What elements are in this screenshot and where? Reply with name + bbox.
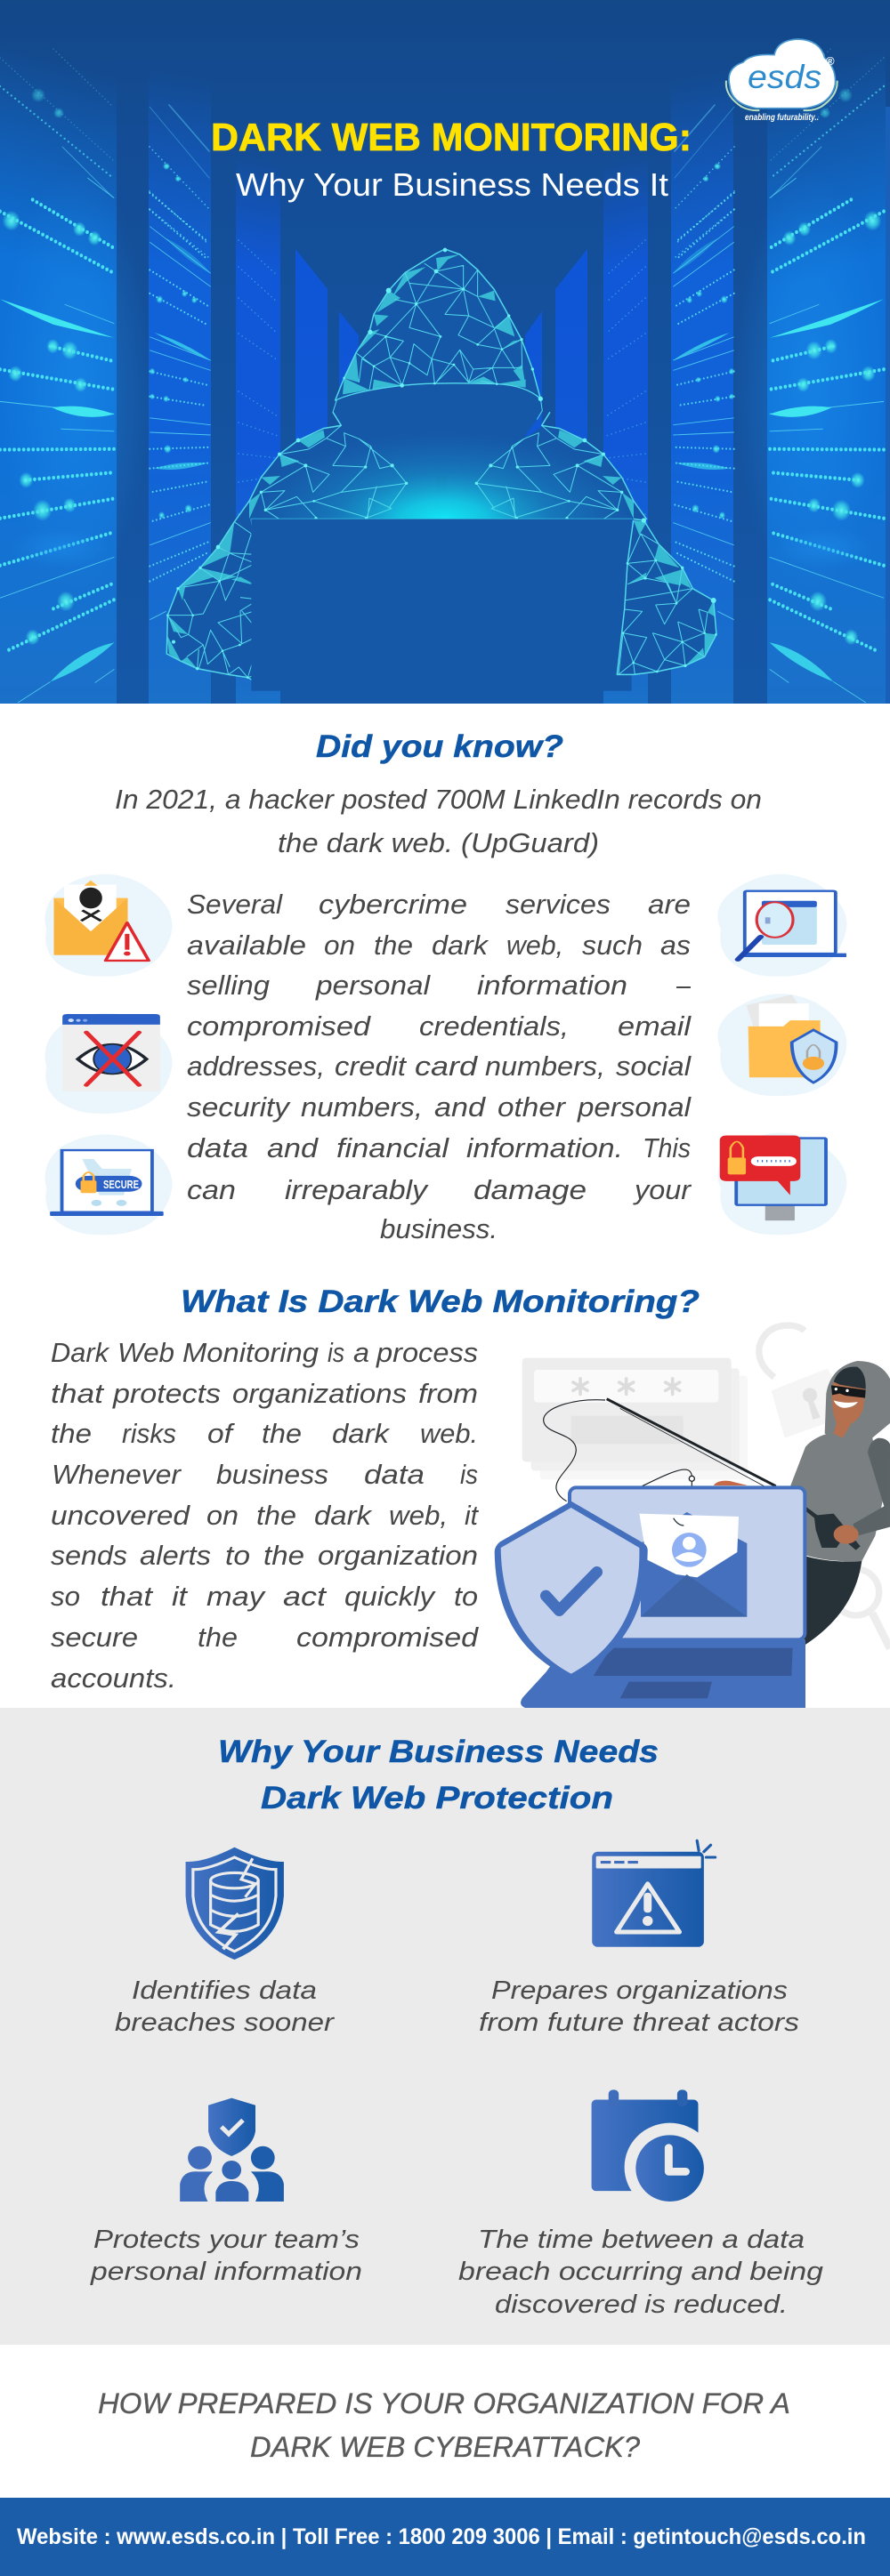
benefit: identifies breaches: breaches sooner [115, 2008, 336, 2037]
icon: calendar clock [592, 2089, 716, 2211]
text block: definition: on [206, 1500, 239, 1531]
text block: cybercrime services: personal [577, 1091, 692, 1123]
text block: cybercrime services: damage [473, 1174, 587, 1205]
benefit: identifies breaches [115, 1976, 336, 2037]
text block: definition: web. [420, 1418, 478, 1449]
benefit: prepares organizations: from future threat actors [479, 2008, 799, 2037]
title: DARK WEB MONITORING: [211, 116, 692, 159]
benefit: reduced time: breach occurring and being [458, 2258, 823, 2286]
icon: folder with shield [717, 994, 846, 1096]
text block: cybercrime services: addresses, [187, 1051, 325, 1082]
text block: definition: to [225, 1540, 250, 1571]
text block: definition: secure [51, 1622, 138, 1653]
closing question [98, 2387, 790, 2463]
benefit: reduced time: The time between a data [478, 2226, 805, 2254]
text block: definition: of [207, 1418, 236, 1449]
faint lock [759, 1325, 852, 1438]
label: secure badge: SECURE [103, 1178, 139, 1191]
logo: esds [726, 39, 837, 123]
icon: team under shield [180, 2098, 284, 2202]
text block: cybercrime services: selling [187, 970, 270, 1001]
shield with check [495, 1501, 648, 1678]
text block: definition: process [376, 1337, 478, 1368]
text block: cybercrime services: – [676, 970, 692, 1001]
text block: definition: compromised [296, 1622, 480, 1653]
right shoulder [475, 411, 648, 519]
text block: definition: risks [122, 1418, 176, 1449]
icon: broken database shield [186, 1847, 284, 1960]
footer contact bar: Website : www.esds.co.in | Toll Free : 1800 209 3006 | Email : getintouch@esds.co.in [17, 2524, 866, 2549]
text block: definition: act [283, 1581, 328, 1612]
footer contact bar [0, 2498, 890, 2576]
envelope with profile card [639, 1512, 747, 1617]
text block: definition: the [262, 1418, 302, 1449]
icon: blocked eye window [45, 1013, 172, 1114]
text block: cybercrime services: information [477, 970, 627, 1001]
text block: cybercrime services: email [618, 1010, 692, 1042]
text block: definition: dark [314, 1500, 373, 1531]
text block: definition: Dark [51, 1337, 109, 1368]
panel: why your business needs protection [0, 1708, 890, 2345]
text block: cybercrime services: social [616, 1051, 692, 1082]
text block: cybercrime services: cybercrime [319, 889, 467, 920]
stat text: LinkedIn records [115, 784, 762, 858]
text block: cybercrime services: Several [187, 889, 283, 920]
text block: cybercrime services: numbers, [485, 1051, 605, 1082]
text block: cybercrime services: services [506, 889, 611, 920]
stat text: LinkedIn records: In 2021, a hacker posted 700M LinkedIn records on [115, 784, 762, 815]
text block: definition: protects [112, 1378, 221, 1409]
heading: what is dark web monitoring: What Is Dark Web Monitoring? [181, 1284, 700, 1319]
text block: cybercrime services: on [324, 930, 355, 961]
text block: definition: sends [51, 1540, 127, 1571]
text block: definition: Whenever [52, 1459, 182, 1490]
hook line [643, 1469, 692, 1512]
benefit: prepares organizations [479, 1976, 799, 2037]
text block: definition: business [216, 1459, 328, 1490]
heading: why your business needs: Dark Web Protection [261, 1781, 613, 1815]
laptop silhouette [251, 519, 632, 691]
text block: definition: the [198, 1622, 238, 1653]
text block: definition: web, [389, 1500, 448, 1531]
text block: cybercrime services: web, [506, 930, 563, 961]
text block: cybercrime services: business. [380, 1213, 498, 1244]
text block: cybercrime services: as [660, 930, 691, 961]
text block: definition: alerts [140, 1540, 211, 1571]
faint magnifier [833, 1569, 890, 1648]
text block: definition: uncovered [51, 1500, 191, 1531]
chest glow [279, 446, 608, 519]
text block: definition: organizations [232, 1378, 407, 1409]
benefit: protects team: personal information [90, 2258, 362, 2286]
text block: definition: data [364, 1459, 425, 1490]
text block: definition: Web [117, 1337, 174, 1368]
text block: definition: the [263, 1540, 304, 1571]
right arm mesh [617, 518, 717, 674]
hooded hacker mesh figure [166, 248, 716, 691]
icon: browser warning [592, 1840, 716, 1947]
text block: cybercrime services: such [582, 930, 643, 961]
heading: why your business needs: Why Your Business Needs [218, 1735, 659, 1769]
text block: cybercrime services: compromised [187, 1010, 372, 1042]
text block: cybercrime services: your [633, 1174, 692, 1205]
text block: cybercrime services: personal [315, 970, 431, 1001]
closing question: DARK WEB CYBERATTACK? [250, 2431, 640, 2463]
text block: cybercrime services: This [643, 1132, 691, 1163]
text block: definition [51, 1337, 480, 1694]
icon: password alert monitor [717, 1132, 846, 1235]
fishing rod and line [544, 1399, 776, 1501]
icon: secure cart laptop [45, 1134, 172, 1235]
text block: cybercrime services: are [648, 889, 691, 920]
server corridor background [0, 36, 890, 704]
text block: definition: the [256, 1500, 296, 1531]
text block: definition: so [51, 1581, 80, 1612]
text block: cybercrime services: available [187, 930, 306, 961]
icon: https magnifier laptop [717, 874, 846, 977]
text block: definition: to [454, 1581, 478, 1612]
logo: esds: ® [826, 54, 835, 68]
benefit: identifies breaches: Identifies data [132, 1976, 317, 2005]
text block: cybercrime services: can [187, 1174, 236, 1205]
text block: definition: a [353, 1337, 369, 1368]
text block: cybercrime services: numbers, [301, 1091, 423, 1123]
text block: cybercrime services: data [187, 1132, 248, 1163]
heading: why your business needs [218, 1735, 659, 1815]
logo: esds: esds [748, 59, 821, 95]
hacker figure [714, 1361, 890, 1646]
text block: definition: may [206, 1581, 267, 1612]
illustration: phishing hacker and laptop [495, 1325, 890, 1708]
stat text: LinkedIn records: the dark web. (UpGuard) [278, 827, 599, 858]
text block: definition: organization [318, 1540, 478, 1571]
text block: cybercrime services [187, 889, 692, 1244]
closing question: HOW PREPARED IS YOUR ORGANIZATION FOR A [98, 2387, 790, 2419]
hood [333, 248, 543, 425]
hero banner [0, 0, 890, 704]
text block: cybercrime services: credentials, [419, 1010, 569, 1042]
text block: definition: is [460, 1459, 478, 1490]
text block: definition: accounts. [51, 1662, 176, 1694]
title [211, 116, 692, 203]
text block: definition: dark [332, 1418, 391, 1449]
icon: envelope with skull and warning [45, 874, 172, 977]
text block: cybercrime services: credit [335, 1051, 407, 1082]
text block: definition: that [51, 1378, 105, 1409]
benefit: reduced time: discovered is reduced. [495, 2290, 788, 2319]
benefit: protects team [90, 2226, 362, 2286]
left shoulder and arm [166, 412, 408, 688]
text block: definition: quickly [344, 1581, 437, 1612]
text block: definition: from [418, 1378, 478, 1409]
laptop [521, 1476, 805, 1708]
text block: definition: is [328, 1337, 344, 1368]
benefit: prepares organizations: Prepares organizations [491, 1976, 788, 2005]
text block: cybercrime services: information. [466, 1132, 623, 1163]
text block: cybercrime services: irreparably [285, 1174, 430, 1205]
text block: cybercrime services: card [415, 1051, 479, 1082]
logo: esds: enabling futurability.. [745, 113, 819, 123]
text block: cybercrime services: and [267, 1132, 320, 1163]
password window [522, 1358, 748, 1479]
text block: cybercrime services: security [187, 1091, 292, 1123]
text block: cybercrime services: and [434, 1091, 487, 1123]
title: Why Your Business Needs It [236, 166, 668, 203]
text block: cybercrime services: the [374, 930, 413, 961]
text block: definition: that [101, 1581, 154, 1612]
text block: cybercrime services: other [498, 1091, 567, 1123]
benefit: protects team: Protects your team’s [93, 2226, 360, 2254]
text block: definition: the [51, 1418, 92, 1449]
text block: definition: it [172, 1581, 189, 1612]
benefit: reduced time [458, 2226, 823, 2319]
text block: cybercrime services: financial [336, 1132, 449, 1163]
heading: did you know: Did you know? [316, 729, 563, 764]
text block: definition: it [465, 1500, 479, 1531]
text block: definition: Monitoring [182, 1337, 319, 1368]
text block: cybercrime services: dark [432, 930, 490, 961]
